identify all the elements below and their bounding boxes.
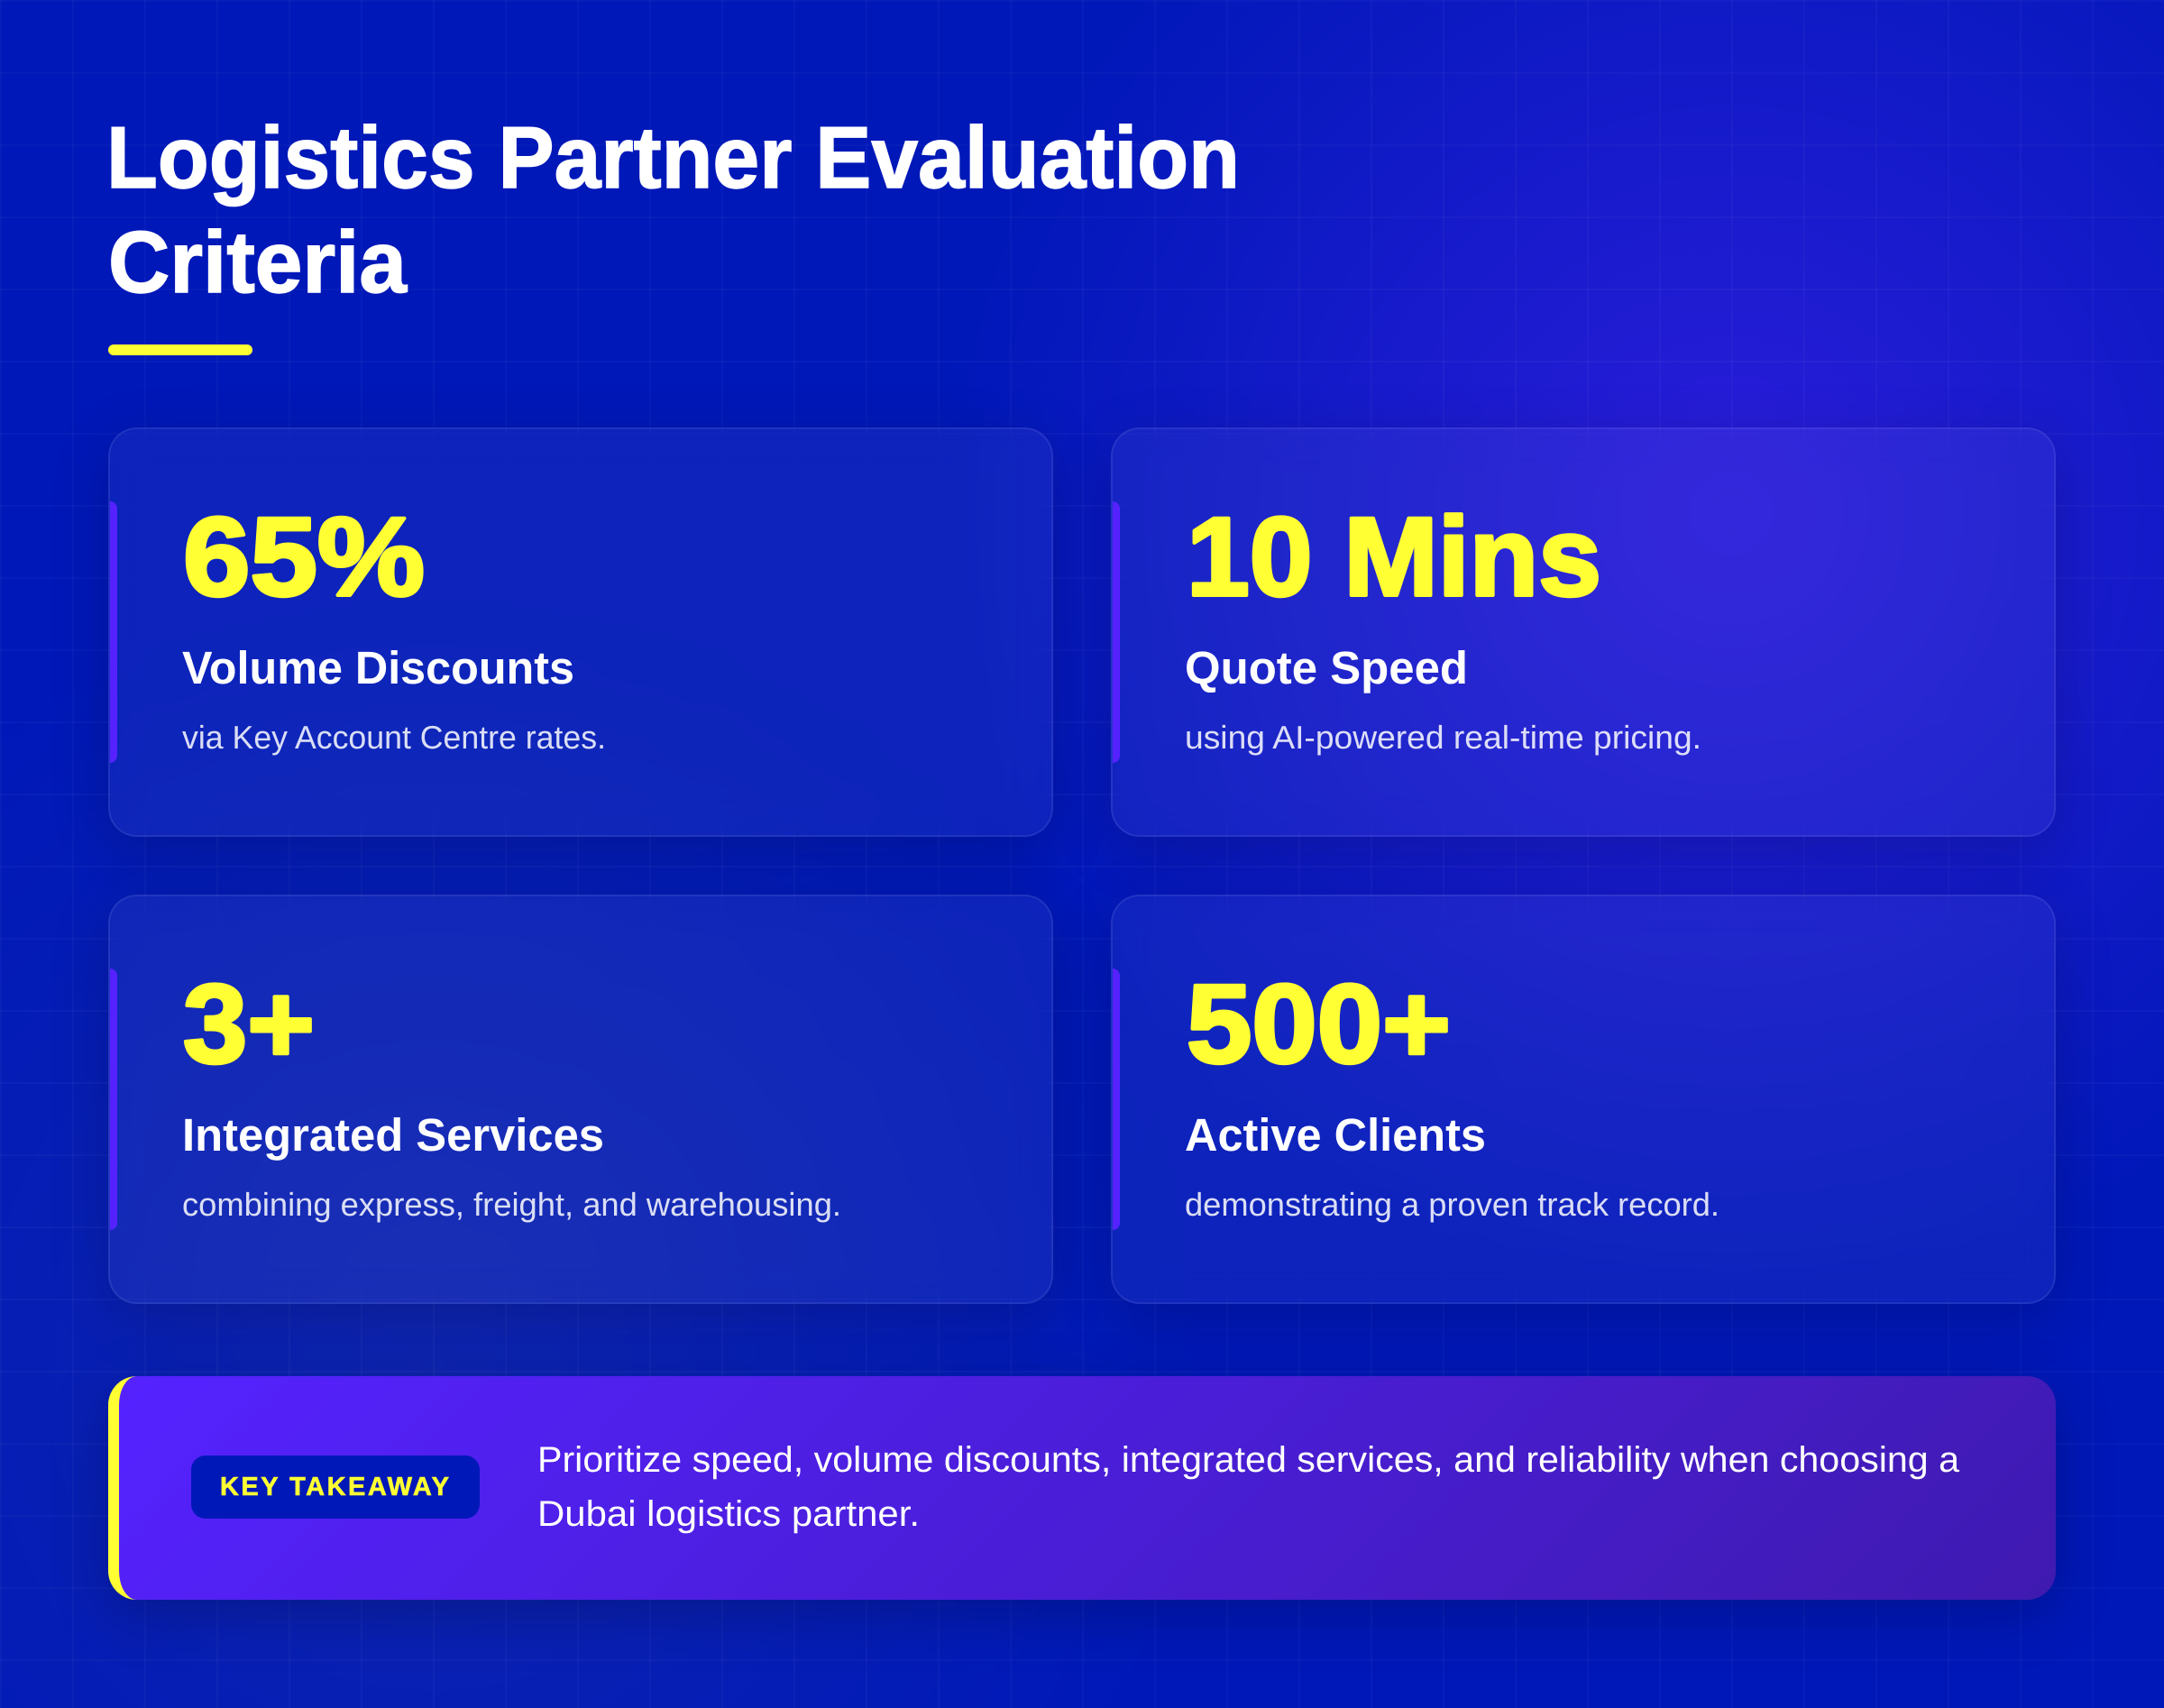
title: Logistics Partner Evaluation bbox=[106, 108, 1240, 207]
takeaway text: Prioritize speed, volume discounts, integrated services, and reliability when choosing a bbox=[537, 1440, 1960, 1480]
panel: integrated services bbox=[108, 895, 1053, 1304]
title underline accent bbox=[108, 344, 252, 355]
panel: volume discounts bbox=[108, 427, 1053, 837]
title bbox=[106, 108, 1240, 311]
stat: 65%: 65% bbox=[183, 495, 425, 620]
stat: 10 mins: 10 Mins bbox=[1187, 495, 1601, 620]
label: active clients: Active Clients bbox=[1185, 1109, 1486, 1161]
panel: active clients bbox=[1111, 895, 2056, 1304]
label: integrated services: Integrated Services bbox=[182, 1109, 604, 1161]
description: via Key Account Centre rates. bbox=[182, 719, 606, 756]
accent bar bbox=[110, 501, 117, 763]
description: combining express, freight, and warehousing. bbox=[182, 1186, 841, 1223]
title: Criteria bbox=[108, 213, 408, 311]
stat: 3+: 3+ bbox=[183, 962, 315, 1087]
takeaway text bbox=[537, 1440, 1960, 1534]
accent bar bbox=[110, 969, 117, 1230]
label: quote speed: Quote Speed bbox=[1185, 642, 1468, 693]
badge: key takeaway bbox=[191, 1455, 480, 1519]
description: using AI-powered real-time pricing. bbox=[1185, 719, 1701, 756]
label: volume discounts: Volume Discounts bbox=[182, 642, 574, 693]
accent bar bbox=[1113, 969, 1120, 1230]
badge label: KEY TAKEAWAY bbox=[220, 1473, 449, 1501]
description: demonstrating a proven track record. bbox=[1185, 1186, 1719, 1223]
accent bar bbox=[1113, 501, 1120, 763]
panel: quote speed bbox=[1111, 427, 2056, 837]
panel: key takeaway bbox=[108, 1376, 2056, 1600]
takeaway text: Dubai logistics partner. bbox=[537, 1494, 920, 1534]
stat: 500+: 500+ bbox=[1187, 962, 1451, 1087]
